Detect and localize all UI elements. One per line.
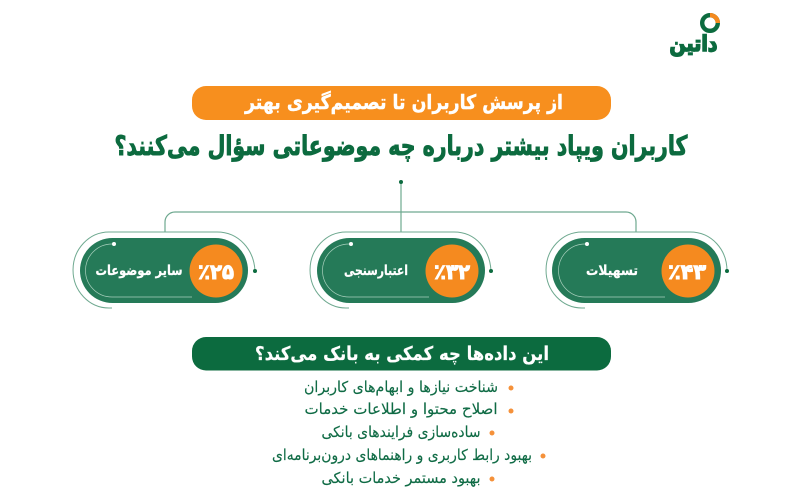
green section banner: این داده‌ها چه کمکی به بانک می‌کند؟: [255, 343, 549, 365]
item: facilitation 43%: تسهیلات: [586, 263, 638, 279]
item: credit scoring 32%: اعتبارسنجی: [344, 263, 408, 279]
list item 4: بهبود رابط کاربری و راهنماهای درون‌برنامه‌ای: [272, 446, 532, 464]
list item 2: اصلاح محتوا و اطلاعات خدمات: [304, 400, 498, 418]
list item 1: شناخت نیازها و ابهام‌های کاربران: [304, 378, 498, 396]
item: credit scoring 32%: ٪۳۲: [434, 260, 470, 284]
benefits list: [272, 378, 546, 487]
item: other topics 25%: ٪۲۵: [198, 260, 234, 284]
list item 5: بهبود مستمر خدمات بانکی: [322, 469, 480, 487]
orange subtitle banner: از پرسش کاربران تا تصمیم‌گیری بهتر: [244, 90, 563, 115]
item: credit scoring 32%: [310, 232, 493, 308]
orange subtitle banner: [192, 86, 611, 120]
logo: Datin: داتین: [670, 32, 718, 57]
list item 3: ساده‌سازی فرایندهای بانکی: [322, 423, 480, 441]
item: facilitation 43%: ٪۴۳: [668, 260, 706, 284]
logo: Datin: [670, 15, 718, 57]
item: facilitation 43%: [546, 232, 729, 308]
connector lines: [165, 180, 636, 232]
item: other topics 25%: [73, 232, 257, 308]
item: other topics 25%: سایر موضوعات: [96, 263, 182, 279]
green section banner: [192, 337, 611, 370]
